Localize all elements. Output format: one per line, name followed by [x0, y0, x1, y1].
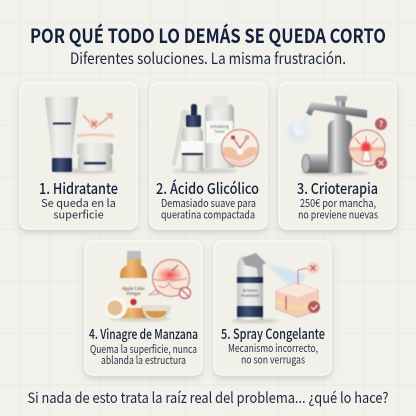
icon: freeze spray can and skin block: treatment: [241, 293, 259, 299]
card description: 250€ por mancha,: [300, 195, 376, 211]
icon: vinegar bottle and irritated skin: Vinegar: [126, 291, 141, 297]
card description: Quema la superficie, nunca: [90, 341, 197, 357]
icon: freeze spray can and skin block: At-home: [242, 288, 258, 294]
card description: queratina compactada: [161, 206, 255, 222]
panel: 3. Crioterapia: [279, 83, 396, 229]
card description: Se queda en la: [41, 195, 116, 211]
card description: Demasiado suave para: [161, 195, 256, 211]
card heading: 2. Ácido Glicólico: [156, 178, 259, 199]
subtitle: Diferentes soluciones. La misma frustración.: [70, 47, 346, 69]
card description: no son verrugas: [241, 352, 305, 368]
card description: [41, 195, 116, 222]
card description: [298, 195, 378, 222]
card description: Mecanismo incorrecto,: [228, 340, 318, 356]
card description: [161, 195, 256, 222]
card heading: 5. Spray Congelante: [221, 324, 325, 344]
icon: cryotherapy canister and skin diagram: ?: [379, 119, 383, 130]
icon: vinegar bottle and irritated skin: Apple Cider: [122, 286, 145, 292]
card description: superficie: [53, 206, 104, 222]
panel: 1. Hidratante: [20, 83, 137, 229]
icon: serum bottles and skin diagram: Exfoliating: [210, 124, 230, 130]
card description: no previene nuevas: [298, 206, 378, 222]
panel: 2. Ácido Glicólico: [150, 83, 267, 229]
icon: tube and jar: [45, 97, 115, 174]
panel: 4. Vinagre de Manzana: [85, 241, 202, 375]
icon: cryotherapy canister and skin diagram: [288, 96, 387, 176]
card heading: 1. Hidratante: [39, 178, 118, 199]
card heading: 4. Vinagre de Manzana: [89, 323, 198, 343]
icon: freeze spray can and skin block: [231, 253, 320, 323]
icon: vinegar bottle and irritated skin: [105, 251, 190, 322]
icon: serum bottles and skin diagram: [172, 96, 258, 174]
card description: ablanda la estructura: [101, 352, 186, 368]
panel: 5. Spray Congelante: [214, 241, 331, 375]
card description: [90, 341, 197, 368]
card heading: 3. Crioterapia: [297, 178, 378, 199]
card description: [228, 340, 318, 368]
icon: serum bottles and skin diagram: Toner: [214, 130, 225, 135]
